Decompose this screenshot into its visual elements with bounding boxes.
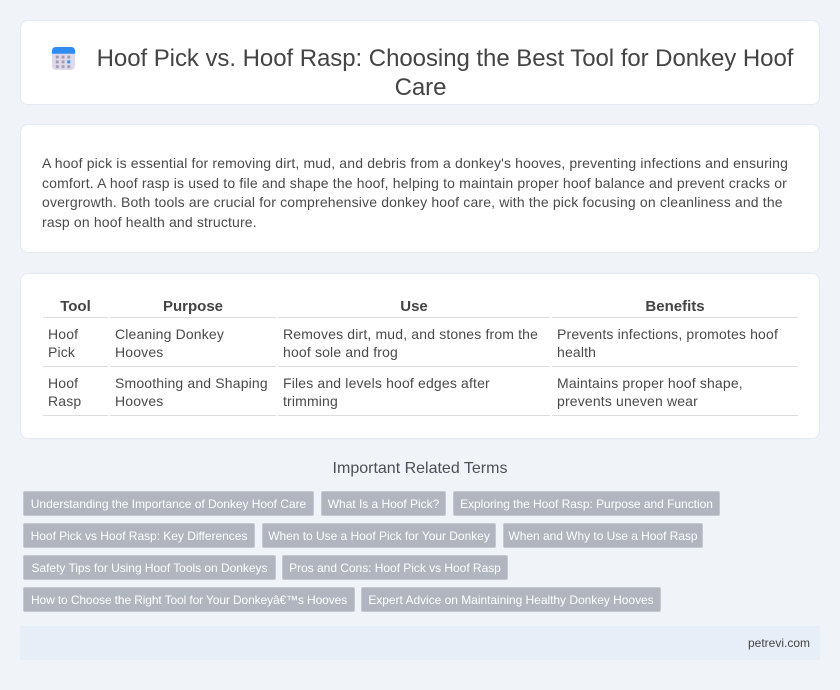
title card — [20, 20, 820, 105]
related terms tags — [23, 491, 720, 612]
related terms tags: Understanding the Importance of Donkey Hoof Care — [31, 497, 306, 511]
intro card — [20, 124, 820, 253]
title: Hoof Pick vs. Hoof Rasp: Choosing the Best Tool for Donkey Hoof — [97, 45, 793, 72]
intro text: comfort. A hoof rasp is used to file and shape the hoof, helping to maintain proper hoof balance and prevent cracks or — [42, 175, 787, 191]
footer — [20, 626, 820, 660]
table card — [20, 273, 820, 439]
related terms heading: Important Related Terms — [333, 460, 507, 477]
comparison table: Hoof — [48, 326, 78, 342]
comparison table: Maintains proper hoof shape, — [557, 375, 743, 391]
related terms tags: Expert Advice on Maintaining Healthy Donkey Hooves — [368, 593, 654, 607]
source: petrevi.com — [748, 636, 810, 650]
comparison table: Pick — [48, 344, 75, 360]
related terms tags: What Is a Hoof Pick? — [328, 497, 439, 511]
title: Care — [395, 74, 446, 101]
comparison table: Hooves — [115, 393, 163, 409]
comparison table: trimming — [283, 393, 338, 409]
comparison table: Benefits — [645, 298, 705, 315]
icon: calendar — [52, 47, 76, 70]
comparison table: health — [557, 344, 596, 360]
related terms tags: When and Why to Use a Hoof Rasp — [508, 529, 698, 543]
related terms tags: Pros and Cons: Hoof Pick vs Hoof Rasp — [289, 561, 501, 575]
related terms tags: Hoof Pick vs Hoof Rasp: Key Differences — [31, 529, 247, 543]
comparison table: Use — [400, 298, 428, 315]
comparison table: hoof sole and frog — [283, 344, 398, 360]
related terms tags: Exploring the Hoof Rasp: Purpose and Function — [460, 497, 713, 511]
intro text — [42, 155, 788, 230]
intro text: A hoof pick is essential for removing dirt, mud, and debris from a donkey's hooves, preventing infections and ensuring — [42, 155, 788, 171]
comparison table: Hooves — [115, 344, 163, 360]
intro text: rasp on hoof health and structure. — [42, 214, 257, 230]
comparison table: Tool — [60, 298, 91, 315]
related terms tags: How to Choose the Right Tool for Your Donkeyâ€™s Hooves — [31, 593, 347, 607]
title — [97, 45, 794, 101]
comparison table: Rasp — [48, 393, 81, 409]
comparison table: Smoothing and Shaping — [115, 375, 268, 391]
comparison table: Prevents infections, promotes hoof — [557, 326, 778, 342]
comparison table: Hoof — [48, 375, 78, 391]
comparison table: prevents uneven wear — [557, 393, 698, 409]
intro text: overgrowth. Both tools are crucial for comprehensive donkey hoof care, with the pick focusing on cleanliness and the — [42, 194, 783, 210]
comparison table: Purpose — [163, 298, 223, 315]
comparison table: Removes dirt, mud, and stones from the — [283, 326, 538, 342]
comparison table: Files and levels hoof edges after — [283, 375, 490, 391]
comparison table: Cleaning Donkey — [115, 326, 224, 342]
comparison table — [43, 298, 798, 416]
related terms tags: Safety Tips for Using Hoof Tools on Donkeys — [32, 561, 267, 575]
related terms tags: When to Use a Hoof Pick for Your Donkey — [268, 529, 490, 543]
